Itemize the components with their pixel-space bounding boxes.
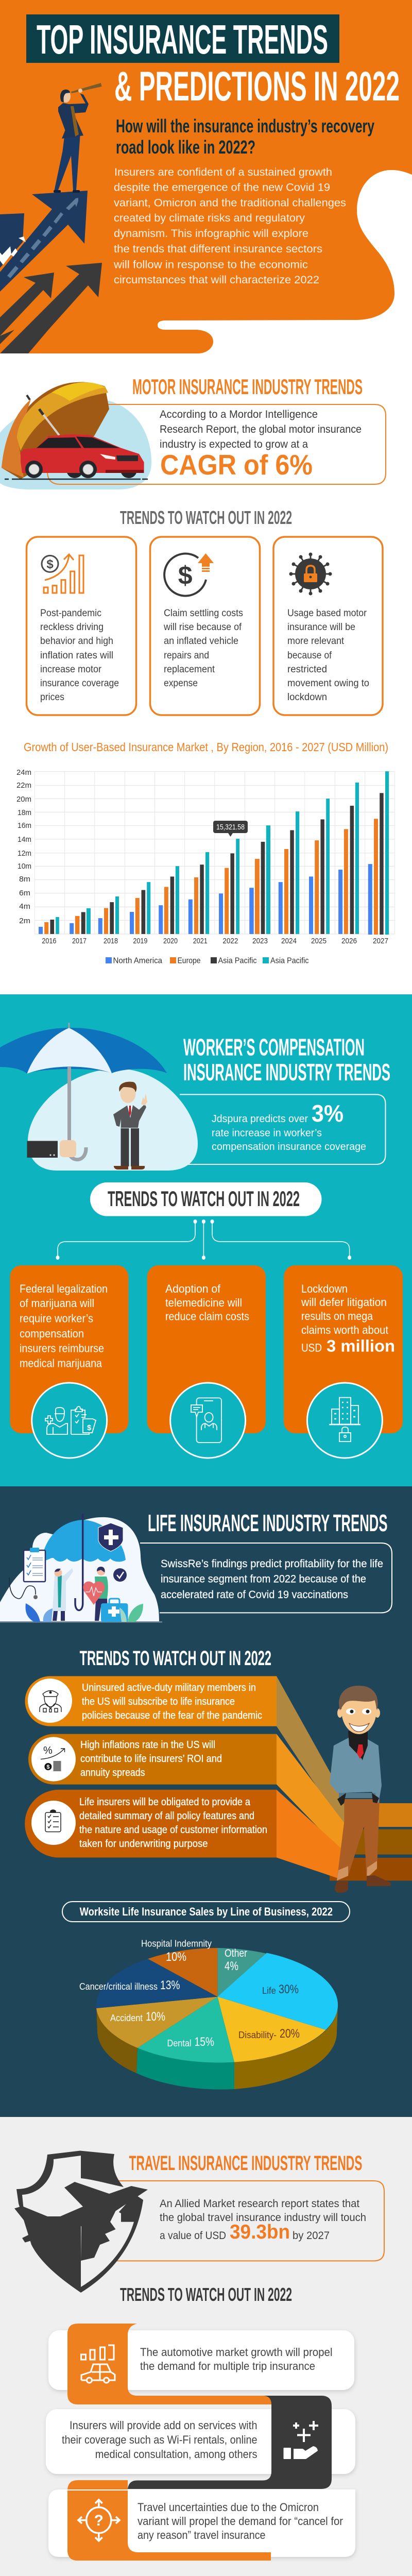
card: usage based — [273, 537, 383, 715]
band: inflation — [28, 1734, 277, 1785]
pill heading: pie chart: Worksite Life Insurance Sales by Line of Business, 2022 — [80, 1905, 333, 1918]
callout: SwissRe — [140, 1543, 392, 1613]
callout: SwissRe: accelerated rate of Covid 19 vaccinations — [161, 1589, 348, 1601]
icon: military officer — [28, 1679, 72, 1723]
pie chart: sales by line of business: 30% — [279, 1982, 299, 1996]
callout: 39.3bn: An Allied Market research report states that — [160, 2198, 359, 2210]
icon: buildings and lock — [307, 1383, 382, 1458]
icon: rising arrows — [0, 191, 102, 353]
callout: CAGR: Research Report, the global motor insurance — [160, 423, 362, 435]
card: reckless driving: Post-pandemic — [40, 608, 101, 619]
band: inflation: annuity spreads — [80, 1767, 145, 1778]
callout: CAGR — [47, 404, 386, 484]
intro paragraph: variant, Omicron and the traditional challenges — [114, 197, 346, 209]
bar chart: user-based insurance market: 8m — [19, 875, 30, 884]
card: claim costs: replacement — [164, 664, 215, 675]
card: claim costs: expense — [164, 678, 198, 689]
icon: car and growth bars — [81, 2345, 115, 2383]
pie labels: Other — [225, 1947, 247, 1959]
icon: percent growth: $ — [46, 1764, 49, 1770]
bar chart: user-based insurance market: 12m — [18, 849, 31, 858]
card: automotive market: the demand for multiple trip insurance — [140, 2360, 315, 2372]
panel: life insurance — [0, 1486, 412, 2117]
icon: plus signs over hand — [283, 2421, 318, 2459]
band: underwriting — [25, 1790, 277, 1858]
chart legend: Asia Pacific — [218, 956, 256, 965]
pie chart: sales by line of business: 20% — [280, 2027, 300, 2041]
panel: hero header — [0, 0, 412, 353]
icon: umbrella and car — [2, 382, 148, 479]
bar chart: user-based insurance market: 2020 — [163, 937, 178, 945]
band: military members: Uninsured active-duty military members in — [82, 1682, 256, 1693]
card: lockdown: will defer litigation — [301, 1296, 387, 1309]
pie chart: sales by line of business: Disability- — [238, 2030, 277, 2040]
band: inflation: contribute to life insurers’ ROI and — [80, 1753, 222, 1765]
subheading question — [116, 115, 374, 158]
chart legend: Asia Pacific — [270, 956, 309, 965]
icon: percent growth — [31, 1737, 76, 1782]
card: Omicron uncertainty — [48, 2489, 355, 2561]
bar chart: user-based insurance market: 10m — [18, 862, 31, 871]
intro paragraph: circumstances that will characterize 2022 — [114, 274, 319, 286]
icon: shield with airplane — [14, 2150, 148, 2293]
card: telemedicine: Adoption of — [165, 1282, 221, 1295]
pie labels: 15% — [195, 2035, 214, 2049]
card: lockdown: results on mega — [301, 1310, 373, 1323]
band: inflation: High inflations rate in the US will — [80, 1739, 215, 1751]
card: Omicron uncertainty: variant will propel the demand for “cancel for — [138, 2515, 343, 2528]
callout: 39.3bn — [116, 2181, 384, 2261]
card: add-on services: medical consultation, among others — [95, 2448, 257, 2461]
card: reckless driving: behavior and high — [40, 636, 113, 647]
card: marijuana: compensation — [20, 1327, 84, 1340]
heading: trends: TRENDS TO WATCH OUT IN 2022 — [80, 1647, 271, 1670]
pill heading: trends — [90, 1182, 321, 1216]
icon: worker and claim form — [32, 1383, 107, 1458]
bar chart: user-based insurance market: 16m — [18, 821, 31, 830]
connector lines — [56, 1219, 351, 1260]
heading: trends: TRENDS TO WATCH OUT IN 2022 — [120, 2284, 292, 2305]
card: lockdown: claims worth about — [301, 1324, 388, 1336]
callout: CAGR: CAGR of 6% — [160, 449, 313, 481]
card: usage based: lockdown — [287, 692, 327, 703]
card: marijuana: require worker’s — [20, 1312, 93, 1325]
intro paragraph: will follow in response to the economic — [113, 259, 308, 271]
icon: worker and claim form: $ — [87, 1423, 92, 1432]
chart legend — [106, 956, 309, 965]
card: lockdown: 3 million — [327, 1337, 395, 1355]
bar chart: user-based insurance market: 2m — [19, 917, 30, 925]
band: underwriting: taken for underwriting purpose — [79, 1838, 208, 1850]
card: add-on services: their coverage such as Wi-Fi rentals, online — [62, 2433, 258, 2446]
card: Omicron uncertainty: Travel uncertainties due to the Omicron — [138, 2501, 319, 2514]
bar chart: user-based insurance market: 6m — [19, 889, 30, 897]
bar chart: user-based insurance market: 4m — [19, 902, 30, 911]
card: automotive market — [48, 2324, 354, 2404]
pie labels — [79, 1938, 247, 2049]
card: claim costs: Claim settling costs — [164, 608, 243, 619]
panel: motor insurance — [0, 375, 394, 965]
card: reckless driving: inflation rates will — [40, 650, 113, 661]
icon: checklist — [31, 1801, 76, 1845]
pie labels: Accident — [110, 2013, 143, 2023]
bar chart: user-based insurance market: 2023 — [252, 937, 268, 945]
card: usage based: more relevant — [287, 636, 345, 647]
icon: rising cost bars — [42, 554, 83, 593]
subheading question: road look like in 2022? — [116, 137, 255, 158]
card: marijuana: Federal legalization — [20, 1282, 108, 1295]
pie chart: sales by line of business: Life — [262, 1986, 276, 1996]
bar chart: user-based insurance market: 2024 — [281, 937, 297, 945]
bar chart: user-based insurance market: 2016 — [42, 937, 56, 945]
card: usage based: movement owing to — [287, 678, 369, 689]
pie labels: Cancer/critical illness — [79, 1981, 158, 1992]
card: marijuana — [10, 1265, 128, 1458]
band: military members — [25, 1676, 277, 1726]
card: telemedicine — [147, 1265, 266, 1458]
icon: percent growth: % — [43, 1745, 53, 1756]
bar chart: user-based insurance market: 2017 — [72, 937, 87, 945]
bar chart: user-based insurance market: 14m — [18, 835, 31, 844]
callout: 39.3bn: a value of USD — [160, 2230, 226, 2242]
bar chart: user-based insurance market: 24m — [16, 768, 31, 777]
bar chart: user-based insurance market: 22m — [16, 781, 31, 790]
callout: 39.3bn: the global travel insurance industry will touch — [160, 2212, 366, 2224]
bar chart: user-based insurance market — [16, 768, 394, 965]
intro paragraph — [113, 166, 346, 286]
bar chart: user-based insurance market: 20m — [16, 795, 31, 804]
pie labels: Dental — [167, 2038, 192, 2048]
heading: trends to watch: TRENDS TO WATCH OUT IN 2022 — [120, 507, 292, 528]
bar chart: user-based insurance market: 2022 — [222, 937, 238, 945]
card: marijuana: medical marijuana — [20, 1357, 102, 1369]
icon: phone with doctor — [170, 1383, 246, 1458]
panel: travel insurance — [0, 2117, 412, 2576]
card: usage based: because of — [287, 650, 332, 661]
bar chart: user-based insurance market: 2018 — [104, 937, 118, 945]
card: add-on services — [46, 2396, 355, 2561]
pill heading: pie chart — [62, 1902, 350, 1922]
band: underwriting: the nature and usage of customer information — [79, 1824, 267, 1836]
band: military members: policies because of the fear of the pandemic — [82, 1710, 262, 1721]
pie labels: Hospital Indemnity — [141, 1938, 212, 1948]
heading: worker's compensation — [183, 1033, 390, 1086]
card: usage based: Usage based motor — [287, 608, 367, 619]
bar chart: user-based insurance market: 2025 — [311, 937, 327, 945]
card: automotive market: The automotive market growth will propel — [140, 2346, 333, 2359]
icon background blob — [0, 398, 151, 489]
bar chart: user-based insurance market: 2027 — [373, 937, 388, 945]
card: claim costs: an inflated vehicle — [164, 636, 238, 647]
card: telemedicine: telemedicine will — [165, 1296, 242, 1309]
icon: businessman with telescope — [54, 83, 102, 193]
callout: CAGR: According to a Mordor Intelligence — [160, 409, 318, 420]
callout: 3 percent — [180, 1094, 385, 1164]
icon: dollar with up arrow — [164, 553, 214, 596]
card: Omicron uncertainty: any reason” travel insurance — [138, 2529, 266, 2541]
callout: 39.3bn: by 2027 — [293, 2230, 330, 2242]
card: claim costs: repairs and — [164, 650, 209, 661]
band: underwriting: Life insurers will be obligated to provide a — [79, 1797, 251, 1808]
intro paragraph: despite the emergence of the new Covid 19 — [114, 181, 330, 194]
chart legend: North America — [113, 956, 162, 965]
intro paragraph: dynamism. This infographic will explore — [114, 228, 308, 240]
panel: worker's compensation — [0, 994, 412, 1486]
card: claim costs — [150, 537, 260, 715]
card: reckless driving: increase motor — [40, 664, 102, 675]
tooltip: 15,321.58 — [216, 823, 245, 832]
callout: 3 percent: compensation insurance coverage — [212, 1141, 366, 1153]
card: lockdown — [284, 1265, 403, 1458]
bar chart: user-based insurance market: 18m — [18, 808, 31, 817]
callout: SwissRe: SwissRe’s findings predict profitability for the life — [161, 1558, 383, 1570]
card: claim costs: will rise because of — [163, 622, 242, 633]
ribbon folds to figure — [277, 1676, 412, 1880]
callout: 3 percent: Jdspura predicts over — [212, 1113, 308, 1125]
pie chart: sales by line of business — [79, 1938, 338, 2090]
card: marijuana: of marijuana will — [20, 1297, 94, 1310]
pie labels: 4% — [225, 1959, 238, 1973]
icon: question with arrows — [78, 2500, 119, 2541]
chart legend: Europe — [177, 956, 201, 965]
icon: dollar with up arrow: $ — [178, 561, 193, 590]
band: military members: the US will subscribe to life insurance — [82, 1696, 235, 1707]
tooltip — [213, 821, 248, 837]
card: Omicron uncertainty: ? — [94, 2512, 104, 2529]
callout: 3 percent: rate increase in worker’s — [212, 1127, 322, 1139]
card: telemedicine: reduce claim costs — [165, 1310, 249, 1323]
pie labels: 13% — [160, 1978, 180, 1992]
icon: umbrella and businessman — [0, 1023, 198, 1171]
card: marijuana: insurers reimburse — [20, 1342, 104, 1355]
callout: CAGR: industry is expected to grow at a — [160, 438, 308, 450]
card: reckless driving: insurance coverage — [40, 678, 119, 689]
pie labels: 10% — [146, 2010, 165, 2024]
band: underwriting: detailed summary of all policy features and — [79, 1810, 254, 1822]
bar chart: user-based insurance market: 2019 — [133, 937, 147, 945]
bar chart: user-based insurance market: 2026 — [341, 937, 357, 945]
icon: virus with lock — [289, 552, 332, 596]
card: reckless driving: reckless driving — [40, 622, 104, 633]
pie labels: 10% — [166, 1950, 186, 1964]
callout: SwissRe: insurance segment from 2022 because of the — [161, 1573, 366, 1585]
card: usage based: restricted — [287, 664, 327, 675]
intro paragraph: the trends that different insurance sectors — [114, 243, 322, 255]
card: reckless driving — [27, 537, 136, 715]
card: usage based: insurance will be — [287, 622, 355, 633]
icon: doctor, patient and umbrella — [0, 1514, 162, 1623]
intro paragraph: Insurers are confident of a sustained growth — [114, 166, 332, 178]
bar chart: user-based insurance market: 2021 — [193, 937, 208, 945]
icon: rising cost bars: $ — [46, 557, 54, 571]
icon: smiling man — [330, 1686, 391, 1893]
intro paragraph: created by climate risks and regulatory — [114, 212, 305, 224]
callout: 3 percent: 3% — [312, 1100, 344, 1127]
card: add-on services: Insurers will provide add on services with — [70, 2419, 258, 2432]
callout: 39.3bn: 39.3bn — [230, 2221, 290, 2243]
card: lockdown: Lockdown — [301, 1282, 348, 1295]
card: reckless driving: prices — [40, 692, 64, 703]
card: lockdown: USD — [301, 1342, 322, 1354]
